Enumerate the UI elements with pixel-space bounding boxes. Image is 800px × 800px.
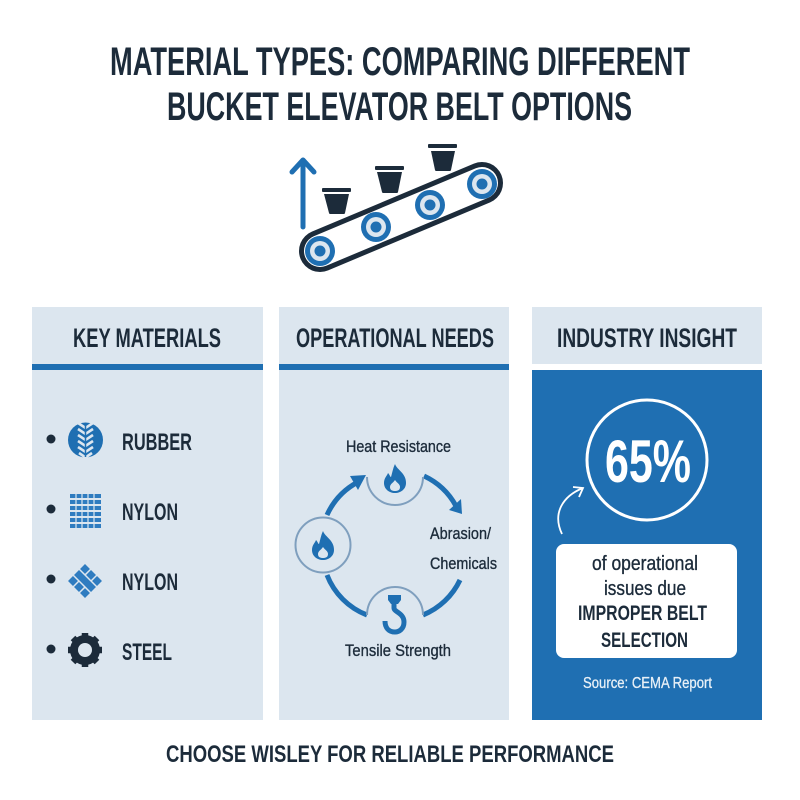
callout: [556, 544, 737, 658]
bucket 3: [428, 144, 457, 171]
icon: bucket elevator conveyor: [292, 144, 497, 266]
callout: of operational: [592, 553, 698, 575]
panel: key materials: [32, 307, 263, 720]
callout: IMPROPER BELT: [578, 602, 707, 625]
node: left flame: [296, 518, 350, 572]
label: steel: STEEL: [122, 639, 172, 666]
arrowheads: [350, 475, 462, 514]
panel: industry insight: [532, 307, 762, 720]
label: nylon: NYLON: [122, 569, 178, 596]
panel: operational needs: [279, 307, 509, 720]
icon: rubber tread: [68, 422, 103, 458]
heading: operational needs: OPERATIONAL NEEDS: [296, 323, 494, 353]
icon: steel gear: [68, 633, 102, 667]
label: heat resistance: Heat Resistance: [346, 437, 451, 456]
bullets: [46, 434, 56, 654]
label: rubber: RUBBER: [122, 429, 192, 456]
node: top flame: [367, 464, 423, 505]
source: Source: CEMA Report: [583, 675, 712, 692]
curved arrow: [558, 487, 583, 534]
stat circle: [587, 400, 707, 520]
label: abrasion / chemicals: [430, 524, 497, 573]
label: abrasion / chemicals: Abrasion/: [430, 524, 491, 543]
cycle arcs: [327, 476, 460, 615]
stat circle: 65%: [605, 428, 691, 495]
heading: key materials: KEY MATERIALS: [73, 323, 221, 353]
label: tensile strength: Tensile Strength: [345, 641, 451, 660]
belt: [320, 183, 482, 251]
label: nylon: NYLON: [122, 499, 178, 526]
insight background: [532, 370, 762, 720]
bucket 2: [375, 166, 404, 193]
bucket 1: [322, 188, 351, 214]
label: abrasion / chemicals: Chemicals: [430, 554, 497, 573]
callout: issues due: [604, 578, 686, 600]
icon: nylon weave grid: [70, 494, 101, 528]
icon: upward arrow: [292, 160, 314, 227]
title: [110, 40, 690, 129]
rollers: [305, 169, 497, 266]
icon: nylon diamond weave: [68, 564, 102, 598]
footer tagline: CHOOSE WISLEY FOR RELIABLE PERFORMANCE: [166, 741, 614, 768]
callout: SELECTION: [601, 629, 688, 652]
node: bottom hook: [367, 587, 423, 632]
